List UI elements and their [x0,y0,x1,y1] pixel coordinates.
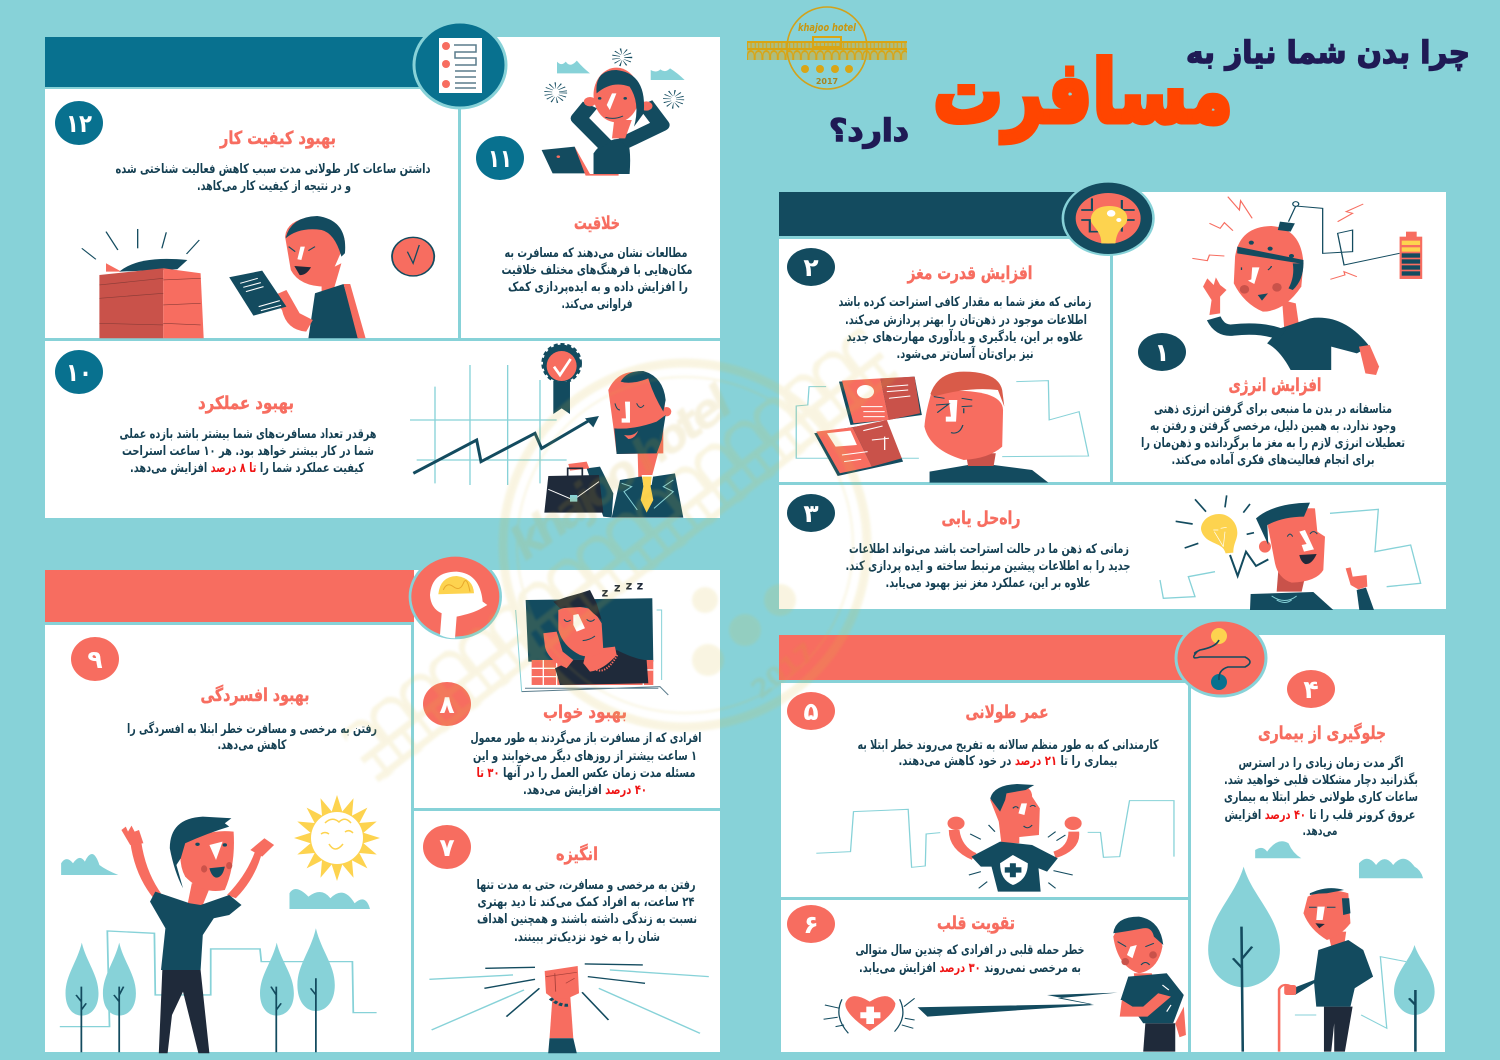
heading: بهبود خواب [543,702,627,723]
circle icon: checklist [414,22,506,108]
body text [120,427,376,476]
panel 6: heart [781,900,1188,1052]
number 12 [55,101,103,145]
number 4 [1287,670,1335,708]
panel 10: performance [45,341,720,518]
body text: ۲۴ ساعت، به افراد کمک می‌کند تا دید بهتری [477,895,695,910]
number 3 [787,494,835,532]
heading: افزایش انرژی [1228,375,1322,396]
panel 11: creativity [461,37,720,338]
number 6 [787,905,835,943]
heading: جلوگیری از بیماری [1258,722,1386,744]
body text: اطلاعات موجود در ذهن‌تان را بهتر پردازش می‌کند. [845,313,1087,328]
section: bottom right [779,620,1445,1052]
body text: کارمندانی که به طور منظم سالانه به تفریح می‌روند خطر ابتلا به [858,738,1159,753]
logo: khajoo hotel: khajoo hotel [798,21,856,34]
heading: بهبود کیفیت کار [219,128,336,149]
header bar [779,635,1189,680]
number 11 [476,136,524,180]
number 3: ۳ [803,499,819,528]
illustration: paper stack and reader [82,216,434,338]
heading: عمر طولانی [966,702,1048,723]
illustration: man and open books [796,372,1089,483]
body text: علاوه بر این، یادگیری و یادآوری مهارت‌های جدید [846,328,1084,345]
number 5: ۵ [803,697,819,726]
body text: بگذرانید دچار مشکلات قلبی خواهید شد. [1224,772,1418,788]
panel 9: depression [45,625,411,1053]
panel 3: problem solving [779,485,1446,610]
body text: کیفیت عملکرد شما را تا ۸ درصد افزایش می‌دهد. [130,461,364,476]
body text [858,738,1159,769]
number 7 [423,825,471,869]
panel 2: brain power [779,239,1110,483]
body text [470,730,702,798]
header bar [45,570,420,622]
body text: ۱ ساعت بیشتر از روزهای دیگر می‌خوابند و این [473,748,697,764]
panel 1: energy [1113,192,1446,482]
number 2 [787,248,835,286]
body text: رفتن به مرخصی و مسافرت خطر ابتلا به افسردگی را [127,721,377,737]
number 2: ۲ [803,253,819,282]
section: top left [45,22,720,518]
number 10 [55,350,103,394]
body text: بیماری را تا ۲۱ درصد در خود کاهش می‌دهند. [898,754,1118,769]
heading: انگیزه [556,843,598,865]
number 5 [787,692,835,730]
body text: تعطیلات انرژی لازم را به مغز ما برگردانده و ذهن‌مان را [1141,435,1405,451]
illustration: woman at laptop [542,51,685,176]
body text: برای انجام فعالیت‌های فکری آماده می‌کند. [1172,451,1374,468]
heading: خلاقیت [574,213,620,234]
body text: خطر حمله قلبی در افرادی که چندین سال متوالی [856,943,1084,958]
body text: وجود ندارد. به همین دلیل، مرخصی گرفتن و رفتن به [1150,418,1396,434]
body text: می‌دهد. [1302,824,1338,839]
body text [1141,401,1405,468]
illustration: sleeping man at window [516,578,668,695]
number 1: ۱ [1154,338,1170,367]
panel 4: disease prevention [1191,635,1445,1052]
panel 5: long life [781,683,1188,897]
number 12: ۱۲ [66,109,92,138]
number 6: ۶ [803,910,819,939]
body text: افرادی که از مسافرت باز می‌گردند به طور معمول [470,730,702,746]
body text [476,878,697,945]
logo: khajoo hotel: 2017 [816,77,838,86]
panel 12: work quality [45,89,458,338]
body text: به مرخصی نمی‌روند ۳۰ درصد افزایش می‌یابد. [859,961,1081,976]
body text: شان را به خود نزدیک‌تر ببینند. [514,930,660,945]
heading: افزایش قدرت مغز [907,263,1032,284]
body text: نیز برای‌تان آسان‌تر می‌شود. [896,345,1034,362]
heading: بهبود عملکرد [198,393,294,414]
body text [856,943,1084,976]
body text: را افزایش داده و به ایده‌پردازی کمک [508,280,688,295]
watermark: khajoo hotel seal: khajoo hotel [500,374,743,571]
number 10: ۱۰ [66,358,92,387]
body text: زمانی که مغز شما به مقدار کافی استراحت کرده باشد [838,295,1092,310]
number 9: ۹ [87,645,103,674]
circle icon: brain in head [410,555,501,638]
title line 1: چرا بدن شما نیاز به [1186,35,1470,71]
title [829,35,1470,149]
illustration: man with lightbulb idea [1160,495,1421,610]
illustration: sleeping man at window: z [637,578,644,592]
body text [1224,755,1418,839]
icon: sun [294,795,380,881]
body text: مکان‌هایی با فرهنگ‌های مختلف خلاقیت [502,262,692,278]
body text: متاسفانه در بدن ما منبعی برای گرفتن انرژی ذهنی [1154,401,1392,417]
body text: کاهش می‌دهد. [218,738,287,753]
section: top right [779,182,1446,610]
illustration: charged head with battery [1192,197,1422,375]
body text [127,721,377,753]
body text: و در نتیجه از کیفیت کار می‌کاهد. [197,179,351,194]
panel 8: sleep [414,570,720,808]
title line 3: دارد؟ [829,113,909,149]
body text: شما در کار بیشتر خواهد بود. هر ۱۰ ساعت استراحت [122,444,374,459]
watermark: khajoo hotel seal: 2017 [746,637,821,706]
number 4: ۴ [1303,675,1319,704]
number 9 [71,637,119,681]
body text: رفتن به مرخصی و مسافرت، حتی به مدت تنها [476,878,696,893]
illustration: heart and man holding chest [824,917,1186,1052]
illustration: happy person, sun and trees [60,795,380,1053]
illustration: sleeping man at window: z [614,581,621,595]
watermark: khajoo hotel seal [340,327,900,783]
heading: بهبود افسردگی [200,684,310,706]
logo: khajoo hotel [747,7,907,89]
body text: عروق کرونر قلب را تا ۴۰ درصد افزایش [1224,808,1416,823]
number 8 [423,682,471,726]
panel 7: motivation [414,811,720,1053]
circle icon: path route [1176,620,1266,696]
number 1 [1138,333,1186,371]
body text: نسبت به زندگی داشته باشند و همچنین اهداف [477,911,697,927]
body text: هرقدر تعداد مسافرت‌های شما بیشتر باشد بازده عملی [120,427,376,442]
illustration: raised fist with rays [429,964,709,1053]
body text [838,295,1092,362]
body text: جدید را به اطلاعات پیشین مرتبط ساخته و ایده پردازی کند. [846,559,1130,574]
body text: داشتن ساعات کار طولانی مدت سبب کاهش فعالیت شناختی شده [116,162,431,177]
body text: ۴۰ درصد افزایش می‌دهد. [523,783,647,798]
heading: راه‌حل یابی [942,508,1020,529]
body text: مطالعات نشان می‌دهند که مسافرت به [504,246,688,261]
body text: ساعات کاری طولانی خطر ابتلا به بیماری [1224,790,1418,805]
body text [116,162,431,194]
number 11: ۱۱ [488,144,512,173]
illustration: old man with cane and trees [1208,841,1435,1052]
body text: مسئله مدت زمان عکس العمل را در آنها ۳۰ تا [476,764,696,781]
heading: تقویت قلب [937,913,1015,934]
section: bottom left [45,555,720,1053]
header bar [779,192,1079,236]
body text [502,246,692,312]
body text: علاوه بر این، عملکرد مغز نیز بهبود می‌یابد. [886,576,1090,591]
illustration: sleeping man at window: z [626,578,633,592]
illustration: businessman with rising chart [410,345,683,518]
number 8: ۸ [439,690,455,719]
body text: فراوانی می‌کند. [562,297,632,312]
body text: اگر مدت زمان زیادی را در استرس [1238,755,1404,771]
header bar [45,37,425,87]
illustration: sleeping man at window: z [602,586,609,600]
body text [846,542,1130,591]
body text: زمانی که ذهن ما در حالت استراحت باشد می‌تواند اطلاعات [849,542,1129,557]
circle icon: lightbulb brain [1063,182,1153,255]
number 7: ۷ [439,833,455,862]
illustration: strong man with shield [816,784,1174,892]
title main word: مسافرت [933,43,1233,143]
